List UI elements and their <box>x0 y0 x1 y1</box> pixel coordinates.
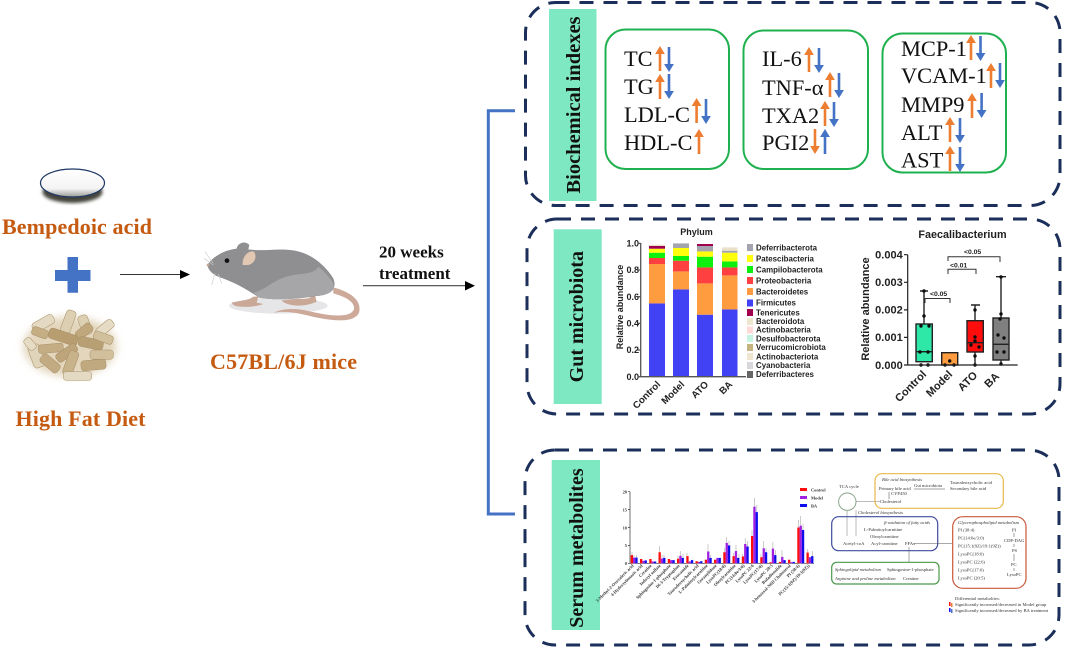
grouped bar chart: metabolites: 20 <box>623 490 628 494</box>
bile acid biosynthesis: Primary bile acid <box>879 486 911 491</box>
glycerophospholipid metabolism: Glycerophospholipid metabolism <box>958 520 1020 525</box>
legend <box>800 488 826 508</box>
bile acid biosynthesis: CYP450 <box>891 491 908 496</box>
glycerophospholipid metabolism <box>953 517 1026 588</box>
sphingolipid and arginine metabolism <box>832 562 939 584</box>
legend: Actinobacteriota <box>756 352 819 362</box>
metabolite labels: Erucamide <box>672 563 690 581</box>
icon: plus sign <box>55 257 90 293</box>
glycerophospholipid metabolism: LysoPC (22:6) <box>958 560 985 564</box>
connector bracket <box>488 111 515 514</box>
sphingolipid and arginine metabolism: Sphingosine-1-phosphate <box>887 567 934 572</box>
legend: Proteobacteria <box>756 276 812 286</box>
stacked bar chart: phylum: 0.6 <box>626 292 639 302</box>
pathway diagram: Cholesterol biosynthesis <box>858 510 903 515</box>
grouped bar chart: metabolites: 15 <box>623 508 628 512</box>
metabolite labels: 3-benzoxol-N6D Cholesterol <box>751 563 792 604</box>
box plot: Faecalibacterium: 0.001 <box>875 332 903 344</box>
icon: high fat diet pellets <box>23 309 117 380</box>
grouped bar chart: metabolites: 5 <box>625 543 628 548</box>
glycerophospholipid metabolism: PI (38:4) <box>958 528 975 532</box>
box plot: Faecalibacterium: Relative abundance <box>860 257 872 361</box>
legend <box>747 244 826 379</box>
box plot: Faecalibacterium: BA <box>982 371 1002 390</box>
stacked bar chart: phylum: 0.2 <box>626 345 639 355</box>
glycerophospholipid metabolism: LysoPC(18:0) <box>958 552 984 556</box>
box: lipids: LDL-C <box>624 102 690 127</box>
box: vascular and liver markers <box>882 34 1006 172</box>
box: lipids: TG <box>624 74 654 99</box>
pathway key <box>949 596 1049 613</box>
metabolite labels: LysoPC 22:6 <box>734 563 755 584</box>
label: Bempedoic acid: Bempedoic acid <box>2 214 152 239</box>
fatty acid oxidation: FFAs <box>905 541 915 546</box>
box plot: Faecalibacterium: 0.003 <box>875 277 903 289</box>
box: vascular and liver markers: VCAM-1 <box>901 63 987 88</box>
legend: Tenericutes <box>756 308 800 318</box>
metabolite labels: LysoPC 20:5 <box>753 563 774 584</box>
metabolite labels: PI (38:4) <box>786 563 801 578</box>
metabolite labels: 4-Hydroxybenzoic acid <box>610 563 644 597</box>
bile acid biosynthesis: Secondary bile acid <box>950 486 987 491</box>
stacked bar chart: phylum: 0.8 <box>626 265 639 275</box>
glycerophospholipid metabolism: PC <box>1011 562 1017 567</box>
box: inflammation: PGI2 <box>762 130 809 155</box>
legend: Deferribacteres <box>756 370 815 379</box>
stacked bar chart: phylum: 0.0 <box>626 372 639 382</box>
box: inflammation <box>744 30 868 169</box>
heading tab: Gut microbiota <box>566 251 588 382</box>
glycerophospholipid metabolism: PC(14:0e/3:0) <box>958 536 985 540</box>
box: inflammation: TXA2 <box>762 103 819 128</box>
glycerophospholipid metabolism: LysoPC <box>1007 572 1022 577</box>
box plot: Faecalibacterium: <0.05 <box>964 249 981 256</box>
metabolite labels: PC(14:0e/3:0) <box>724 563 746 585</box>
box plot: Faecalibacterium: Control <box>893 369 929 405</box>
bile acid biosynthesis: Cholesterol <box>880 499 902 504</box>
stacked bar chart: phylum: ATO <box>690 379 711 401</box>
box plot: Faecalibacterium: Model <box>924 369 955 400</box>
metabolite labels: Creatine <box>638 563 653 578</box>
BA bar <box>722 247 738 377</box>
heading tab: Serum metabolites <box>566 468 588 628</box>
legend: Actinobacteria <box>756 326 811 334</box>
heading tab <box>552 460 600 630</box>
box plot: Faecalibacterium: <0.05 <box>930 291 947 298</box>
fatty acid oxidation: β-oxidation of fatty acids <box>883 520 930 525</box>
heading tab: Biochemical indexes <box>563 16 585 194</box>
glycerophospholipid metabolism: LysoPC (20:5) <box>958 576 985 580</box>
pathway diagram <box>832 474 1049 613</box>
glycerophospholipid metabolism: PS <box>1012 548 1018 553</box>
legend: Verrucomicrobiota <box>756 343 826 352</box>
box: inflammation: TNF-α <box>762 75 824 100</box>
significance brackets <box>925 257 1000 303</box>
panel: gut microbiota <box>527 219 1060 414</box>
legend: Patescibacteria <box>756 254 815 264</box>
stacked bar chart: phylum <box>615 227 826 411</box>
box: vascular and liver markers: MMP9 <box>901 92 964 117</box>
box: lipids: HDL-C <box>624 130 692 155</box>
metabolite labels: Indoxyl sulfate <box>638 563 662 586</box>
sphingolipid and arginine metabolism: Creatine <box>903 576 919 581</box>
metabolite labels: Geranylidone <box>696 563 718 585</box>
box plot: Faecalibacterium: 0.002 <box>875 305 903 317</box>
icon: C57BL/6J mouse <box>204 243 360 320</box>
pathway key: Differential metabolites: <box>955 596 1000 601</box>
stacked bar chart: phylum: BA <box>717 379 735 397</box>
sphingolipid and arginine metabolism: Arginine and proline metabolism <box>834 576 896 581</box>
legend: Campilobacterota <box>756 266 823 274</box>
panel: serum metabolites <box>525 450 1059 645</box>
BA series <box>635 512 813 563</box>
bile acid biosynthesis <box>875 474 1003 508</box>
grouped bar chart: metabolites: 10 <box>623 526 628 530</box>
legend: Desulfobacterota <box>756 334 821 344</box>
whiskers and boxes <box>916 277 1009 365</box>
glycerophospholipid metabolism: PI <box>1012 528 1017 532</box>
legend: Firmicutes <box>756 298 797 308</box>
metabolite labels: Oleoylcarnitine <box>713 563 737 587</box>
legend: Model <box>811 496 824 500</box>
data points <box>918 275 1006 367</box>
metabolite labels: Bufadienolide <box>761 563 783 585</box>
error bars <box>632 498 812 559</box>
metabolite labels: Taurodeoxycholic acid <box>666 563 700 596</box>
stacked bar chart: phylum: 0.4 <box>626 318 639 328</box>
metabolite labels: PC(15:1(9Z)/19:1(9Z)) <box>777 563 811 597</box>
panel: biochemical indexes <box>526 2 1060 206</box>
box plot: Faecalibacterium: 0.000 <box>875 360 903 372</box>
metabolite labels: LysoPC(17:0) <box>742 563 764 585</box>
label: C57BL/6J mice: C57BL/6J mice <box>210 349 357 374</box>
legend: Cyanobacteria <box>756 361 811 370</box>
heading tab <box>549 9 596 201</box>
fatty acid oxidation: Oleoylcarnitine <box>870 534 899 539</box>
stacked bar chart: phylum: Relative abundance <box>615 265 625 349</box>
legend: Control <box>811 488 826 492</box>
stacked bar chart: phylum: Phylum <box>680 227 713 237</box>
box: vascular and liver markers: ALT <box>901 120 943 145</box>
grouped bar chart: metabolites: 0 <box>625 561 628 566</box>
model bar <box>673 243 689 377</box>
glycerophospholipid metabolism: PC(15:1(9Z)/19:1(9Z)) <box>958 544 1001 548</box>
metabolite labels: Sphingosine-1-phosphate <box>635 563 672 600</box>
fatty acid oxidation: Acyl-carnitine <box>871 541 898 546</box>
box plot: Faecalibacterium <box>860 229 1018 405</box>
bile acid biosynthesis: Taurodeoxycholic acid <box>950 480 993 485</box>
arrow: diet to mice <box>120 270 190 279</box>
grouped bar chart: metabolites <box>595 488 826 604</box>
stacked bar chart: phylum: 1.0 <box>626 238 639 248</box>
arrow: mice to treatment <box>363 281 475 290</box>
box: inflammation: IL-6 <box>762 46 802 71</box>
legend: Bacteroidetes <box>756 288 809 296</box>
fatty acid oxidation: Acetyl-coA <box>843 541 865 546</box>
pathway key: Significantly increased/decreased by BA treatment <box>955 608 1049 613</box>
metabolite labels: Dl-3-Tryptophan <box>655 563 681 589</box>
stacked bar chart: phylum: Model <box>660 379 687 407</box>
fatty acid oxidation: L-Palmitoylcarnitine <box>864 527 902 532</box>
ATO bar <box>697 244 713 377</box>
control bar <box>649 245 665 377</box>
TCA cycle node: TCA cycle <box>839 484 859 489</box>
label: High Fat Diet: High Fat Diet <box>16 406 146 431</box>
heading tab <box>554 229 602 404</box>
glycerophospholipid metabolism: LysoPC(17:0) <box>958 568 984 572</box>
model series <box>633 507 811 563</box>
legend: Bacteroidota <box>756 317 805 326</box>
TCA cycle node <box>839 484 880 536</box>
glycerophospholipid metabolism: CDP-DAG <box>1004 538 1025 543</box>
bile acid biosynthesis: Bile acid biosynthesis <box>882 477 922 482</box>
fatty acid oxidation <box>832 517 952 562</box>
box plot: Faecalibacterium: <0.01 <box>950 262 967 270</box>
control series <box>631 528 809 563</box>
box: vascular and liver markers: MCP-1 <box>901 36 967 61</box>
stacked bar chart: phylum: Control <box>631 379 663 411</box>
legend: Deferribacterota <box>756 244 818 252</box>
label: 20 weeks treatment: 20 weeks <box>379 242 444 262</box>
box plot: Faecalibacterium: Faecalibacterium <box>918 229 1007 241</box>
box: lipids <box>606 30 729 169</box>
pathway key: Significantly increased/decreased in Model group <box>955 602 1047 607</box>
metabolite labels <box>595 563 811 604</box>
metabolite labels: LysoPC(18:0) <box>705 563 727 585</box>
metabolite labels: L-Palmitoylcarnitine <box>677 563 709 594</box>
legend: BA <box>811 504 818 508</box>
icon: bempedoic acid tablet <box>40 169 104 203</box>
bile acid biosynthesis: Gut microbiota <box>914 483 942 488</box>
label: 20 weeks treatment: treatment <box>379 264 451 283</box>
sphingolipid and arginine metabolism: Sphingolipid metabolism <box>835 567 881 572</box>
metabolite labels: 3-Methyl-2-Oxovaleric acid <box>595 563 635 603</box>
box: lipids: TC <box>624 46 653 71</box>
box: vascular and liver markers: AST <box>901 148 944 172</box>
box plot: Faecalibacterium: 0.004 <box>875 250 904 262</box>
box plot: Faecalibacterium: ATO <box>956 369 980 394</box>
